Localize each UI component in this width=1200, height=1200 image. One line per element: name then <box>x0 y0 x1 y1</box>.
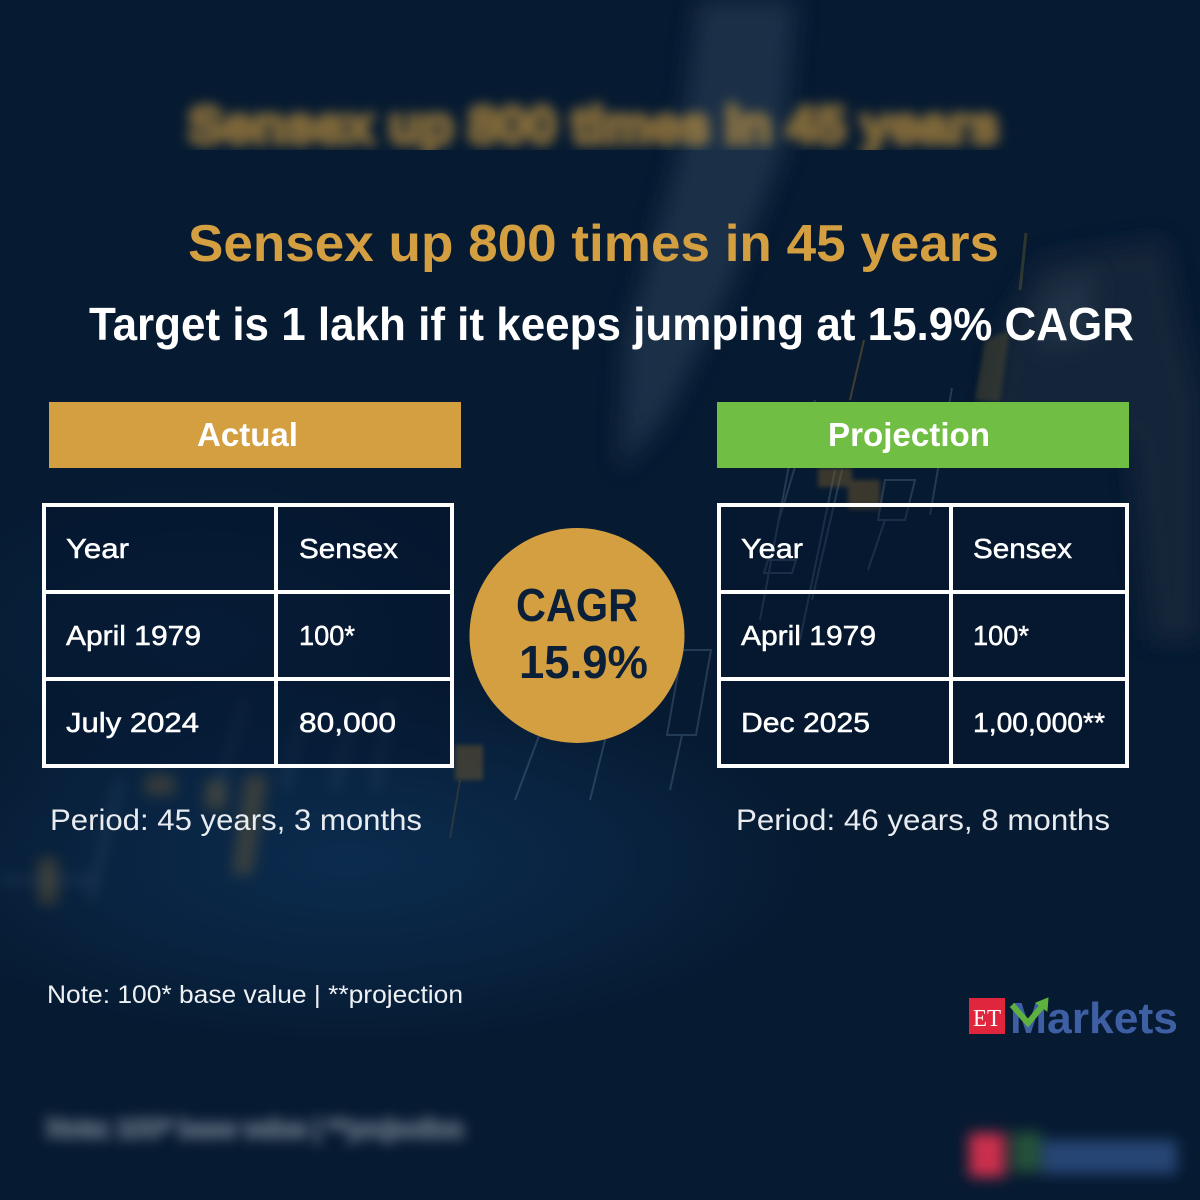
table: actual: July 2024 <box>66 707 199 738</box>
period: projection: Period: 46 years, 8 months <box>736 804 1110 837</box>
table: actual: 100* <box>299 620 355 651</box>
blurred duplicate logo <box>969 1132 1177 1177</box>
table: projection: 100* <box>973 620 1029 651</box>
table: projection: April 1979 <box>741 620 876 651</box>
table: actual: April 1979 <box>66 620 201 651</box>
callout: CAGR circle <box>470 528 684 743</box>
panel: actual header: Actual <box>197 416 298 453</box>
table: projection: Year <box>741 533 803 564</box>
panel: projection header: Projection <box>828 416 990 453</box>
table: actual <box>44 505 452 766</box>
subtitle: Target is 1 lakh if it keeps jumping at 15.9% CAGR <box>89 298 1134 350</box>
blurred duplicate note: Note: 100* base value | **projection <box>47 1115 463 1143</box>
table: actual: Year <box>66 533 129 564</box>
table: actual: Sensex <box>299 533 398 564</box>
table: projection: 1,00,000** <box>973 707 1105 738</box>
table: actual: 80,000 <box>299 707 396 738</box>
table: projection: Dec 2025 <box>741 707 870 738</box>
note: Note: 100* base value | **projection <box>47 981 463 1009</box>
table: projection: Sensex <box>973 533 1072 564</box>
blurred duplicate heading: Sensex up 800 times in 45 years <box>188 97 999 155</box>
logo: ET Markets: Markets <box>1010 994 1178 1043</box>
panel: projection header <box>717 402 1129 468</box>
callout: CAGR circle: CAGR <box>516 579 638 631</box>
callout: CAGR circle: 15.9% <box>519 636 648 688</box>
period: actual: Period: 45 years, 3 months <box>50 804 422 837</box>
title: Sensex up 800 times in 45 years <box>188 215 999 273</box>
logo: ET Markets: ET <box>973 1006 1001 1032</box>
table: projection <box>719 505 1127 766</box>
panel: actual header <box>49 402 461 468</box>
